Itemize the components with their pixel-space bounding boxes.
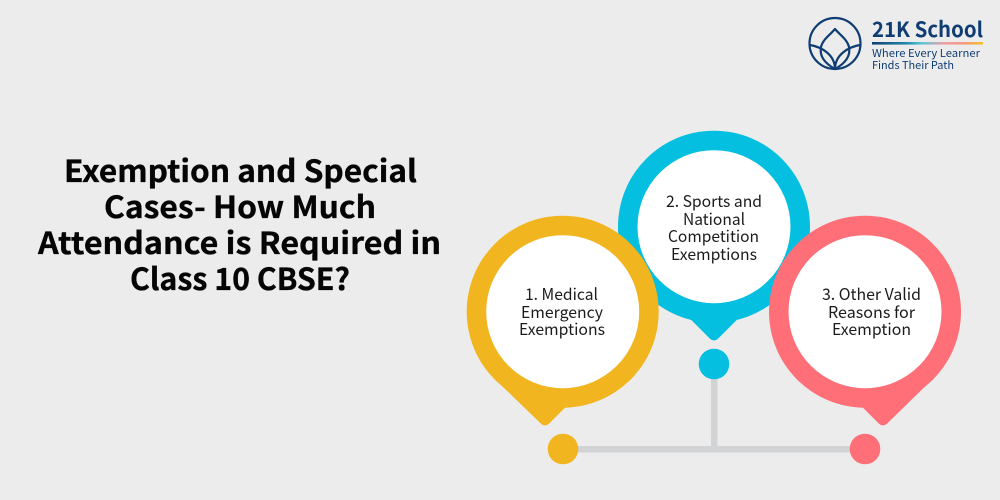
pin 3 label: Exemption (832, 316, 911, 340)
pin 3 label: 3. Other Valid (822, 281, 921, 305)
pin 3 label: Reasons for (828, 299, 916, 323)
pin 3 dot (850, 434, 880, 464)
pin 1 label: Exemptions (519, 316, 605, 340)
logo (810, 14, 983, 73)
pin 1 dot (548, 434, 578, 464)
title: Exemption and Special (64, 147, 417, 191)
pin 3: other valid reasons (769, 216, 961, 425)
pin 2 label: National (683, 206, 745, 230)
pin 3 label (822, 281, 921, 340)
pin 2: sports and national competition (618, 131, 810, 340)
pin 2 label: Exemptions (671, 241, 757, 265)
title: Attendance is Required in (37, 219, 441, 263)
logo tagline (872, 45, 981, 73)
pin 2 label: 2. Sports and (666, 188, 762, 212)
pin 2 dot (699, 349, 729, 379)
title (37, 147, 441, 299)
pin 1 label (519, 281, 605, 340)
pin 1: medical emergency (467, 216, 659, 425)
pin 2 label (666, 188, 762, 265)
pin 2 label: Competition (668, 223, 759, 247)
title: Cases- How Much (104, 183, 376, 227)
title: Class 10 CBSE? (130, 255, 350, 299)
logo gradient bar (872, 42, 983, 45)
pin 1 label: Emergency (521, 299, 604, 323)
logo icon: lotus in circle (810, 18, 860, 69)
connector lines (575, 375, 855, 452)
logo tagline: Where Every Learner (872, 45, 981, 61)
logo wordmark: 21K School (872, 14, 983, 44)
pin 1 label: 1. Medical (525, 281, 598, 305)
logo tagline: Finds Their Path (872, 57, 954, 73)
